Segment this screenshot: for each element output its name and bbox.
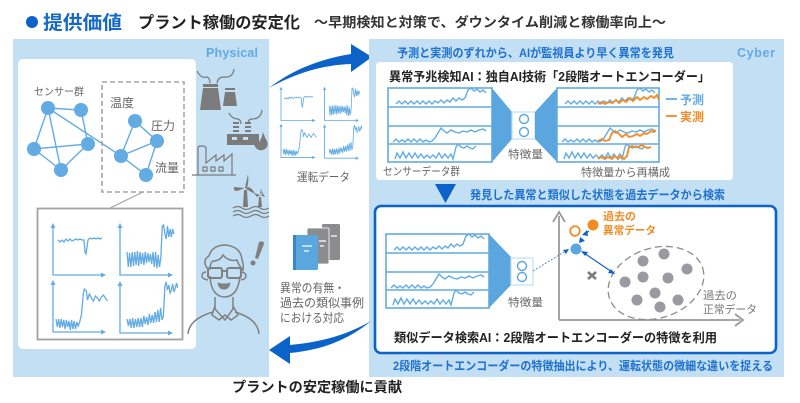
- title: ～早期検知と対策で、ダウンタイム削減と稼働率向上～: [314, 14, 666, 30]
- arrow: cyber to physical: [269, 321, 371, 364]
- icon: outlined factory: [192, 146, 236, 175]
- icon: exclamation mark: [250, 241, 264, 266]
- past anomaly label: 異常データ: [603, 223, 656, 237]
- panel: cyber: [369, 39, 784, 377]
- legend: [666, 92, 704, 124]
- sensor labels: [110, 96, 179, 175]
- encoder: [489, 234, 511, 308]
- icon: cooling towers: [197, 69, 237, 110]
- labels: 特徴量から再構成: [581, 165, 670, 179]
- operator response text: [280, 280, 364, 325]
- labels: [383, 147, 670, 179]
- panel: physical: [13, 39, 269, 377]
- labels: 特徴量: [508, 147, 543, 161]
- arrow: physical to cyber: [269, 44, 372, 88]
- encoder: [492, 88, 512, 162]
- icon: case documents: [293, 224, 340, 270]
- title: プラント稼働の安定化: [138, 13, 300, 32]
- caption: early detection: 予測と実測のずれから、AIが監視員より早く異常を発見: [397, 45, 674, 60]
- caption: search past data: 発見した異常と類似した状態を過去データから検索: [470, 187, 725, 202]
- caption: feature extraction: 2段階オートエンコーダーの特徴抽出により、運転状態の微細な違いを捉える: [393, 358, 773, 373]
- legend: 予測: [680, 92, 704, 107]
- feature nodes: [511, 258, 533, 285]
- arrow: down triangle: [435, 184, 456, 203]
- past normal label: 過去の: [703, 289, 737, 302]
- panel: anomaly prediction AI: [376, 62, 733, 180]
- operator response text: における対応: [280, 311, 344, 325]
- feature label: 特徴量: [508, 295, 543, 309]
- anomaly AI heading: 異常予兆検知AI：独自AI技術「2段階オートエンコーダー」: [389, 69, 710, 84]
- physical label: Physical: [206, 46, 258, 60]
- operator response text: 過去の類似事例: [280, 296, 364, 310]
- operating data label: 運転データ: [297, 170, 350, 184]
- dashed selection box: [102, 82, 184, 192]
- sensor labels: 圧力: [151, 119, 175, 133]
- input sensor charts: [388, 88, 492, 162]
- icon: wind turbines: [233, 174, 269, 218]
- zoomed sensor charts: [50, 223, 178, 336]
- zoomed charts box: [38, 208, 182, 340]
- sensor labels: 流量: [155, 161, 179, 175]
- past normal label: 正常データ: [703, 302, 757, 316]
- past anomaly label: [603, 209, 656, 237]
- search AI heading: 類似データ検索AI：2段階オートエンコーダーの特徴を利用: [394, 330, 717, 345]
- past normal label: [703, 289, 757, 316]
- scatter plot: [533, 212, 743, 331]
- decoder: [535, 88, 557, 162]
- operator response text: 異常の有無・: [280, 280, 345, 295]
- reconstructed charts: [557, 88, 659, 162]
- conclusion text: プラントの安定稼働に貢献: [232, 379, 402, 395]
- title: 提供価値: [43, 12, 122, 34]
- cyber label: Cyber: [737, 46, 775, 60]
- icon: factory with flame: [227, 110, 268, 150]
- past anomaly label: 過去の: [603, 209, 636, 223]
- feature nodes: [512, 112, 535, 139]
- sensor network: [27, 101, 164, 182]
- panel: sensor network and charts: [18, 59, 196, 349]
- icon: operator: [188, 245, 259, 334]
- sensor labels: 温度: [110, 96, 134, 110]
- legend: 実測: [680, 109, 704, 124]
- panel: similar data search AI: [375, 206, 776, 353]
- operating data charts: [279, 87, 362, 160]
- zoom connector: [110, 192, 143, 208]
- input charts: [386, 234, 489, 308]
- labels: センサーデータ群: [383, 164, 460, 178]
- sensor group label: センサー群: [34, 85, 84, 98]
- title: [26, 12, 666, 34]
